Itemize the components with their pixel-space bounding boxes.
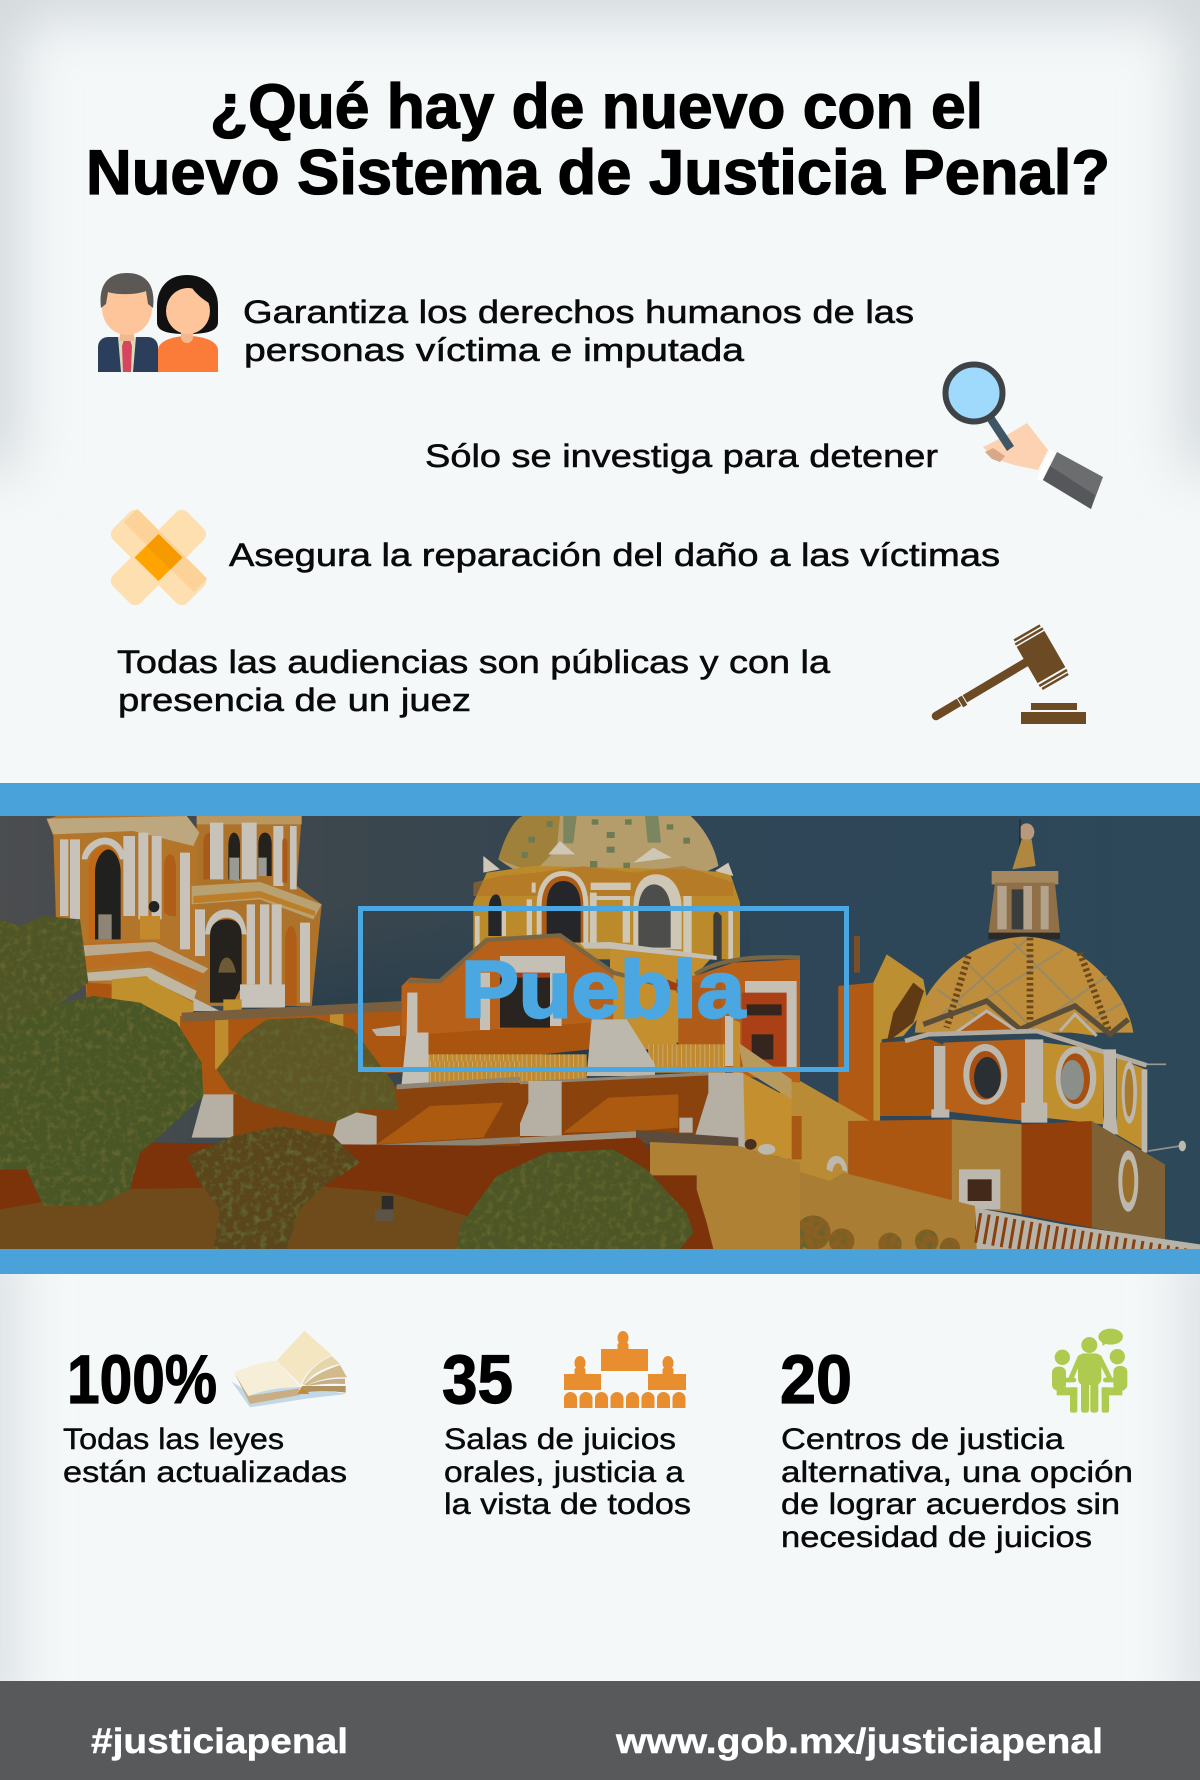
footer bar (0, 1681, 1200, 1780)
icon: magnifier and hand (946, 364, 1103, 509)
stat: 100%: están actualizadas (63, 1456, 347, 1489)
left towers and wall section (0, 816, 520, 1249)
footer hashtag: #justiciapenal (91, 1722, 348, 1761)
text: audiencias (117, 644, 830, 718)
icon: mediation group (1052, 1329, 1127, 1413)
icon: open book (232, 1331, 347, 1407)
Puebla heading: Puebla (461, 945, 746, 1035)
bush (457, 1149, 693, 1249)
top vignette (0, 0, 1200, 470)
stat: 100%: Todas las leyes (63, 1423, 284, 1456)
stat: 20: 20 (780, 1341, 852, 1418)
lower vignette (0, 1274, 1200, 1681)
title: Nuevo Sistema de Justicia Penal? (86, 138, 1110, 208)
title: ¿Qué hay de nuevo con el (210, 72, 983, 142)
icon: bandage cross (108, 507, 209, 608)
icon: courtroom (564, 1331, 686, 1408)
stat: 35: orales, justicia a (444, 1456, 685, 1489)
text: reparacion: Asegura la reparación del daño a las víctimas (229, 537, 1000, 573)
Puebla frame (360, 908, 846, 1070)
text: derechos humanos: Garantiza los derechos humanos de las (243, 294, 914, 330)
central church section (400, 816, 800, 1249)
right church section (777, 819, 1200, 1266)
blue band top (0, 783, 1200, 816)
icon: two people (98, 273, 218, 372)
text: derechos humanos (243, 294, 914, 368)
trees and hillside (0, 916, 467, 1249)
text: investiga: Sólo se investiga para detener (425, 438, 938, 474)
stat: 35: 35 (442, 1341, 513, 1418)
text: audiencias: Todas las audiencias son públicas y con la (117, 644, 830, 680)
icon: gavel (936, 624, 1086, 724)
stat: 20: necesidad de juicios (781, 1521, 1092, 1554)
text: audiencias: presencia de un juez (118, 682, 471, 718)
stat: 35: la vista de todos (444, 1488, 691, 1521)
stat: 35 (442, 1341, 691, 1521)
stat: 20 (780, 1341, 1133, 1554)
title (86, 72, 1110, 208)
stat: 20: Centros de justicia (781, 1423, 1065, 1456)
stat: 100%: 100% (67, 1341, 217, 1418)
stat: 35: Salas de juicios (444, 1423, 676, 1456)
text: derechos humanos: personas víctima e imputada (244, 332, 744, 368)
stat: 20: de lograr acuerdos sin (781, 1488, 1120, 1521)
footer url: www.gob.mx/justiciapenal (615, 1722, 1103, 1761)
blue band bottom (0, 1249, 1200, 1274)
photo: Puebla church (0, 816, 1200, 1266)
stat: 100% (63, 1341, 347, 1489)
stat: 20: alternativa, una opción (781, 1456, 1133, 1489)
